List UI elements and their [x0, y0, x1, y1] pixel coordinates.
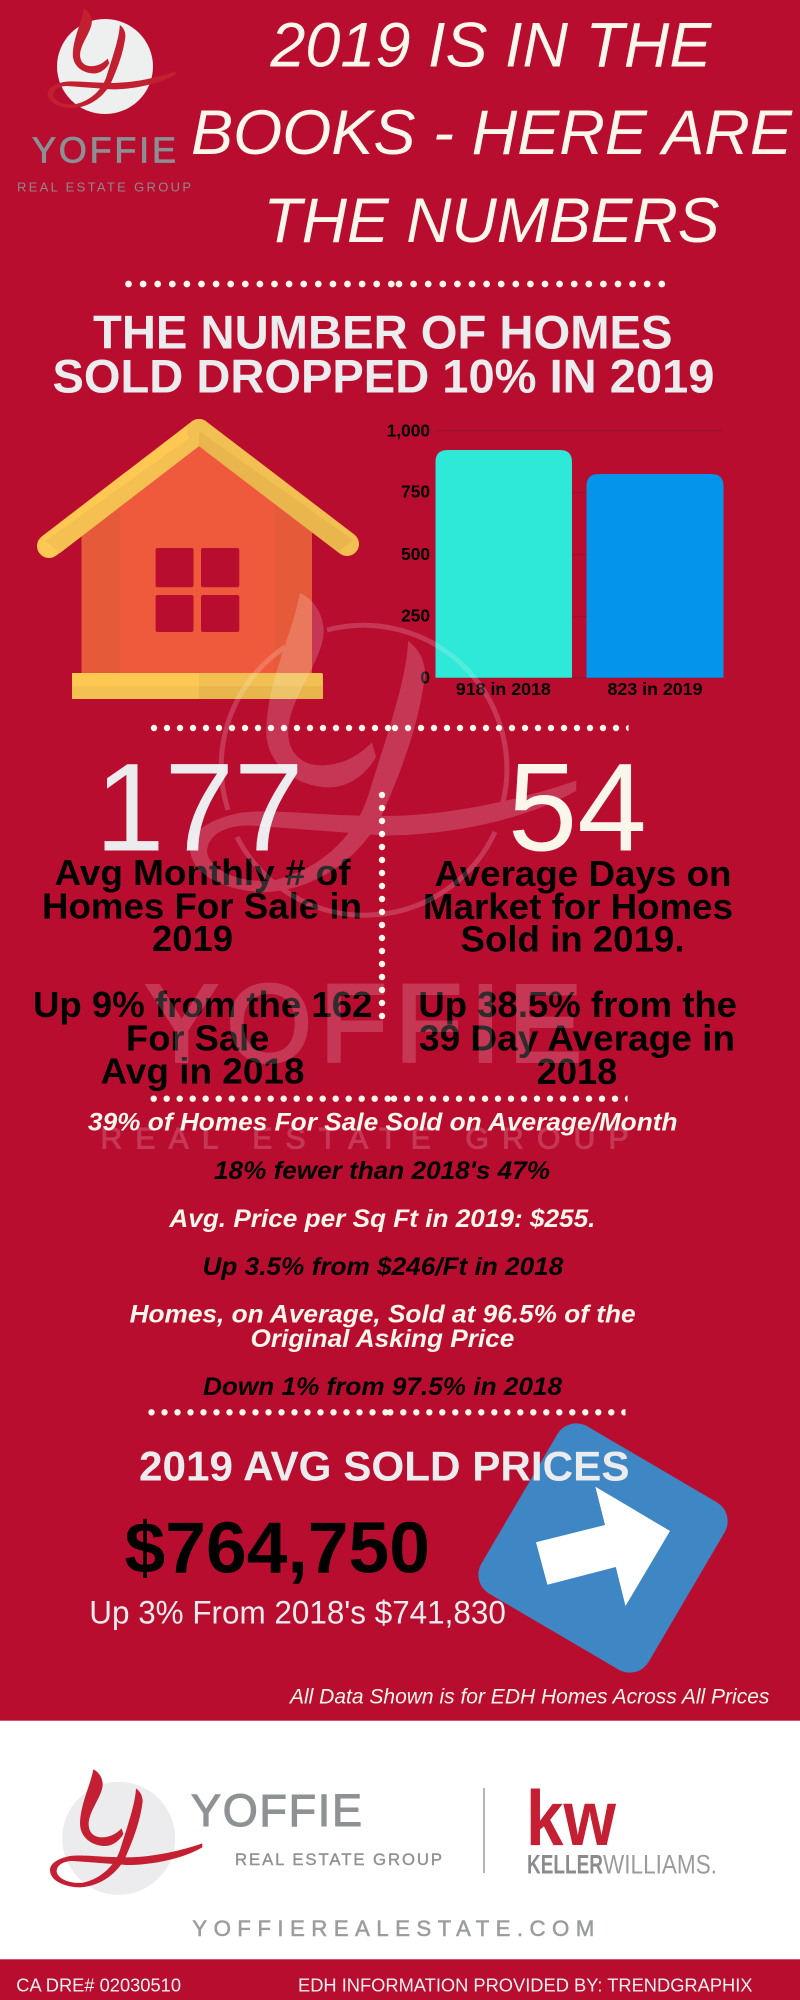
- stat: 54 average days on market: Sold in 2019.: [460, 918, 684, 960]
- bar chart: homes sold: 823 in 2019: [608, 679, 703, 699]
- stat: 177 homes for sale: 2019: [152, 918, 233, 959]
- logo: Keller Williams: KELLER: [527, 1850, 603, 1880]
- logo: Yoffie top left: YOFFIE: [32, 130, 176, 170]
- bar chart: homes sold: 500: [401, 544, 430, 564]
- stat: 177 homes for sale: Avg Monthly # of: [54, 852, 352, 893]
- stat: 177 homes for sale: For Sale: [126, 1017, 269, 1058]
- icon: blue diamond with arrow: [470, 1415, 736, 1681]
- stat: 54 average days on market: 2018: [537, 1051, 617, 1092]
- stat: 177 homes for sale: Up 9% from the 162: [33, 984, 372, 1025]
- stat: 54 average days on market: 39 Day Average in: [419, 1018, 735, 1058]
- watermark: Yoffie logo: [100, 593, 628, 1155]
- heading: number of homes sold: THE NUMBER OF HOMES: [93, 306, 672, 358]
- bar: 823 in 2019: [586, 474, 724, 678]
- text block: monthly and price stats: Homes, on Average, Sold at 96.5% of the: [130, 1301, 636, 1329]
- stat: 54 average days on market: Up 38.5% from the: [418, 984, 737, 1025]
- stat: 177 homes for sale: Avg in 2018: [100, 1051, 304, 1092]
- stat: 54 average days on market: Market for Homes: [423, 886, 733, 927]
- stat: average sold price: $764,750: [124, 1507, 430, 1588]
- text: price change: Up 3% From 2018's $741,830: [89, 1594, 506, 1630]
- stat: 177 homes for sale: Homes For Sale in: [42, 885, 362, 926]
- website: YOFFIEREALESTATE.COM: [192, 1916, 594, 1941]
- stat: 177 homes for sale: [33, 739, 372, 1092]
- logo: Yoffie top left: REAL ESTATE GROUP: [17, 180, 191, 194]
- footnote: All Data Shown is for EDH Homes Across All Prices: [288, 1684, 770, 1708]
- logo: Keller Williams: [526, 1774, 717, 1880]
- title: [191, 10, 793, 256]
- logo: Yoffie footer: [50, 1769, 442, 1895]
- bar chart: homes sold: 0: [420, 667, 430, 687]
- title: BOOKS - HERE ARE: [191, 98, 793, 168]
- icon: house: [45, 430, 353, 699]
- bar chart: homes sold: 1,000: [387, 421, 430, 441]
- text: license number: CA DRE# 02030510: [16, 1976, 181, 1996]
- logo: Yoffie footer: REAL ESTATE GROUP: [235, 1850, 442, 1869]
- logo: Yoffie footer: YOFFIE: [191, 1785, 362, 1836]
- stat: 54 average days on market: 54: [508, 739, 647, 878]
- heading: 2019 avg sold prices: 2019 AVG SOLD PRICES: [139, 1443, 630, 1490]
- watermark: Yoffie logo: REAL ESTATE GROUP: [100, 1122, 628, 1155]
- heading: number of homes sold: [52, 306, 715, 402]
- panel: white footer band: [0, 1721, 800, 1959]
- text block: monthly and price stats: Original Asking Price: [250, 1325, 514, 1353]
- bar chart: homes sold: [387, 421, 724, 699]
- title: THE NUMBERS: [264, 186, 720, 256]
- logo: Yoffie top left: [17, 9, 191, 195]
- bar chart: homes sold: 918 in 2018: [456, 679, 551, 699]
- bar chart: homes sold: 750: [401, 482, 430, 502]
- bar: 918 in 2018: [436, 450, 572, 678]
- text block: monthly and price stats: Down 1% from 97.5% in 2018: [203, 1373, 562, 1401]
- text block: monthly and price stats: 18% fewer than 2018's 47%: [214, 1157, 550, 1185]
- stat: 54 average days on market: [418, 739, 737, 1092]
- text block: monthly and price stats: 39% of Homes For Sale Sold on Average/Month: [88, 1109, 678, 1137]
- text block: monthly and price stats: Up 3.5% from $246/Ft in 2018: [202, 1253, 563, 1281]
- bar chart: homes sold: 250: [401, 606, 430, 626]
- logo: Keller Williams: kw: [526, 1774, 616, 1862]
- title: 2019 IS IN THE: [269, 10, 712, 80]
- heading: number of homes sold: SOLD DROPPED 10% IN 2019: [52, 350, 715, 402]
- watermark: Yoffie logo: YOFFIE: [145, 963, 582, 1086]
- text block: monthly and price stats: [88, 1109, 678, 1401]
- stat: 54 average days on market: Average Days on: [434, 853, 732, 894]
- text block: monthly and price stats: Avg. Price per Sq Ft in 2019: $255.: [168, 1205, 595, 1233]
- stat: 177 homes for sale: 177: [95, 739, 304, 878]
- text: data source: EDH INFORMATION PROVIDED BY: TRENDGRAPHIX: [298, 1976, 752, 1996]
- logo: Keller Williams: WILLIAMS.: [603, 1850, 717, 1880]
